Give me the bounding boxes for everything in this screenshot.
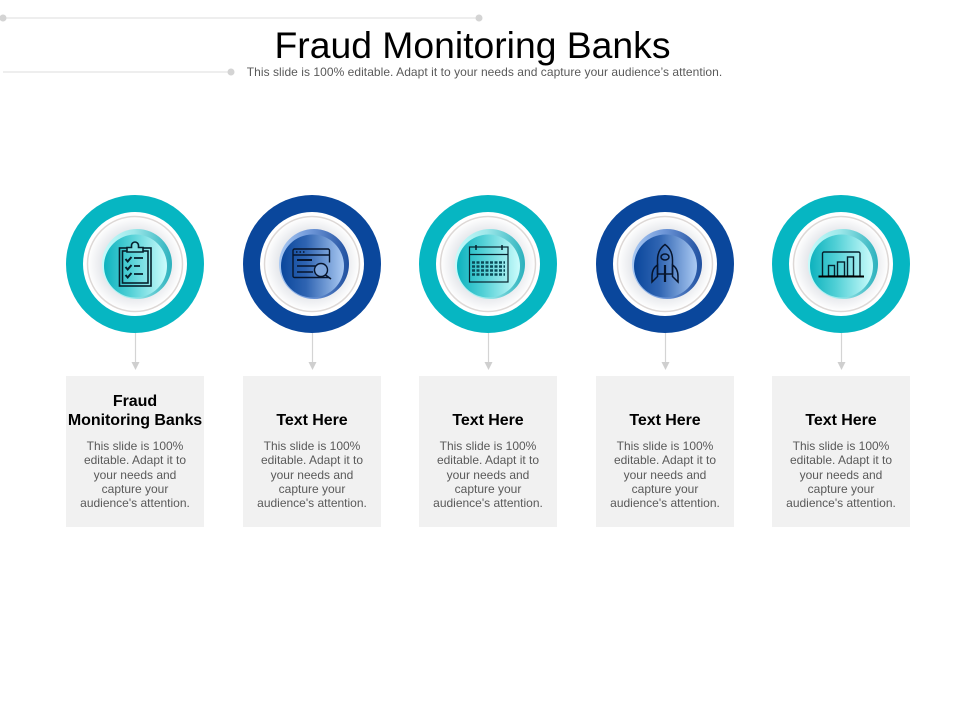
panel: card 4: Text Here — [629, 412, 701, 429]
panel: card 5 — [772, 376, 910, 527]
panel: card 1: audience's attention. — [80, 496, 190, 510]
panel: card 1 — [66, 376, 204, 527]
arrow 1 — [132, 333, 140, 370]
circle 5: bar chart — [772, 195, 910, 333]
panel: card 2: Text Here — [276, 412, 348, 429]
panel: card 5: capture your — [808, 482, 874, 496]
panel: card 1: editable. Adapt it to — [84, 453, 186, 467]
arrow 4 — [662, 333, 670, 370]
panel: card 4: This slide is 100% — [617, 439, 713, 453]
icon: calendar — [470, 245, 508, 282]
circle 3: calendar — [419, 195, 557, 333]
panel: card 3: This slide is 100% — [440, 439, 536, 453]
arrow 5 — [838, 333, 846, 370]
arrow 3 — [484, 333, 492, 370]
panel: card 2 — [243, 376, 381, 527]
panel: card 5: This slide is 100% — [793, 439, 889, 453]
icon: clipboard — [120, 242, 151, 286]
panel: card 3: editable. Adapt it to — [437, 453, 539, 467]
panel: card 1: Monitoring Banks — [68, 412, 202, 429]
arrow 2 — [308, 333, 316, 370]
panel: card 2: audience's attention. — [257, 496, 367, 510]
panel: card 1: your needs and — [94, 468, 176, 482]
panel: card 4: capture your — [632, 482, 698, 496]
panel: card 3: your needs and — [447, 468, 529, 482]
panel: card 5: editable. Adapt it to — [790, 453, 892, 467]
panel: card 1: capture your — [102, 482, 168, 496]
panel: card 5: your needs and — [800, 468, 882, 482]
icon: bar chart screen — [818, 252, 864, 276]
panel: card 3: Text Here — [452, 412, 524, 429]
panel: card 2: This slide is 100% — [264, 439, 360, 453]
panel: card 2: editable. Adapt it to — [261, 453, 363, 467]
panel: card 1: This slide is 100% — [87, 439, 183, 453]
circle 1: clipboard checklist — [66, 195, 204, 333]
title: Fraud Monitoring Banks — [275, 24, 670, 66]
panel: card 2: your needs and — [271, 468, 353, 482]
panel: card 5: audience's attention. — [786, 496, 896, 510]
icon: browser window with magnifier — [293, 249, 331, 279]
icon: rocket — [652, 244, 678, 282]
panel: card 4: editable. Adapt it to — [614, 453, 716, 467]
panel: card 3: audience's attention. — [433, 496, 543, 510]
decorative line: second with end dot — [3, 68, 234, 76]
subtitle: This slide is 100% editable. Adapt it to your needs and capture your audience’s attention. — [247, 65, 722, 79]
panel: card 2: capture your — [279, 482, 345, 496]
panel: card 4: audience's attention. — [610, 496, 720, 510]
panel: card 5: Text Here — [805, 412, 877, 429]
circle 4: rocket — [596, 195, 734, 333]
panel: card 3: capture your — [455, 482, 521, 496]
panel: card 1: Fraud — [113, 393, 157, 410]
panel: card 3 — [419, 376, 557, 527]
decorative line: top with end dots — [0, 14, 482, 22]
circle 2: browser search — [243, 195, 381, 333]
panel: card 4: your needs and — [624, 468, 706, 482]
panel: card 4 — [596, 376, 734, 527]
